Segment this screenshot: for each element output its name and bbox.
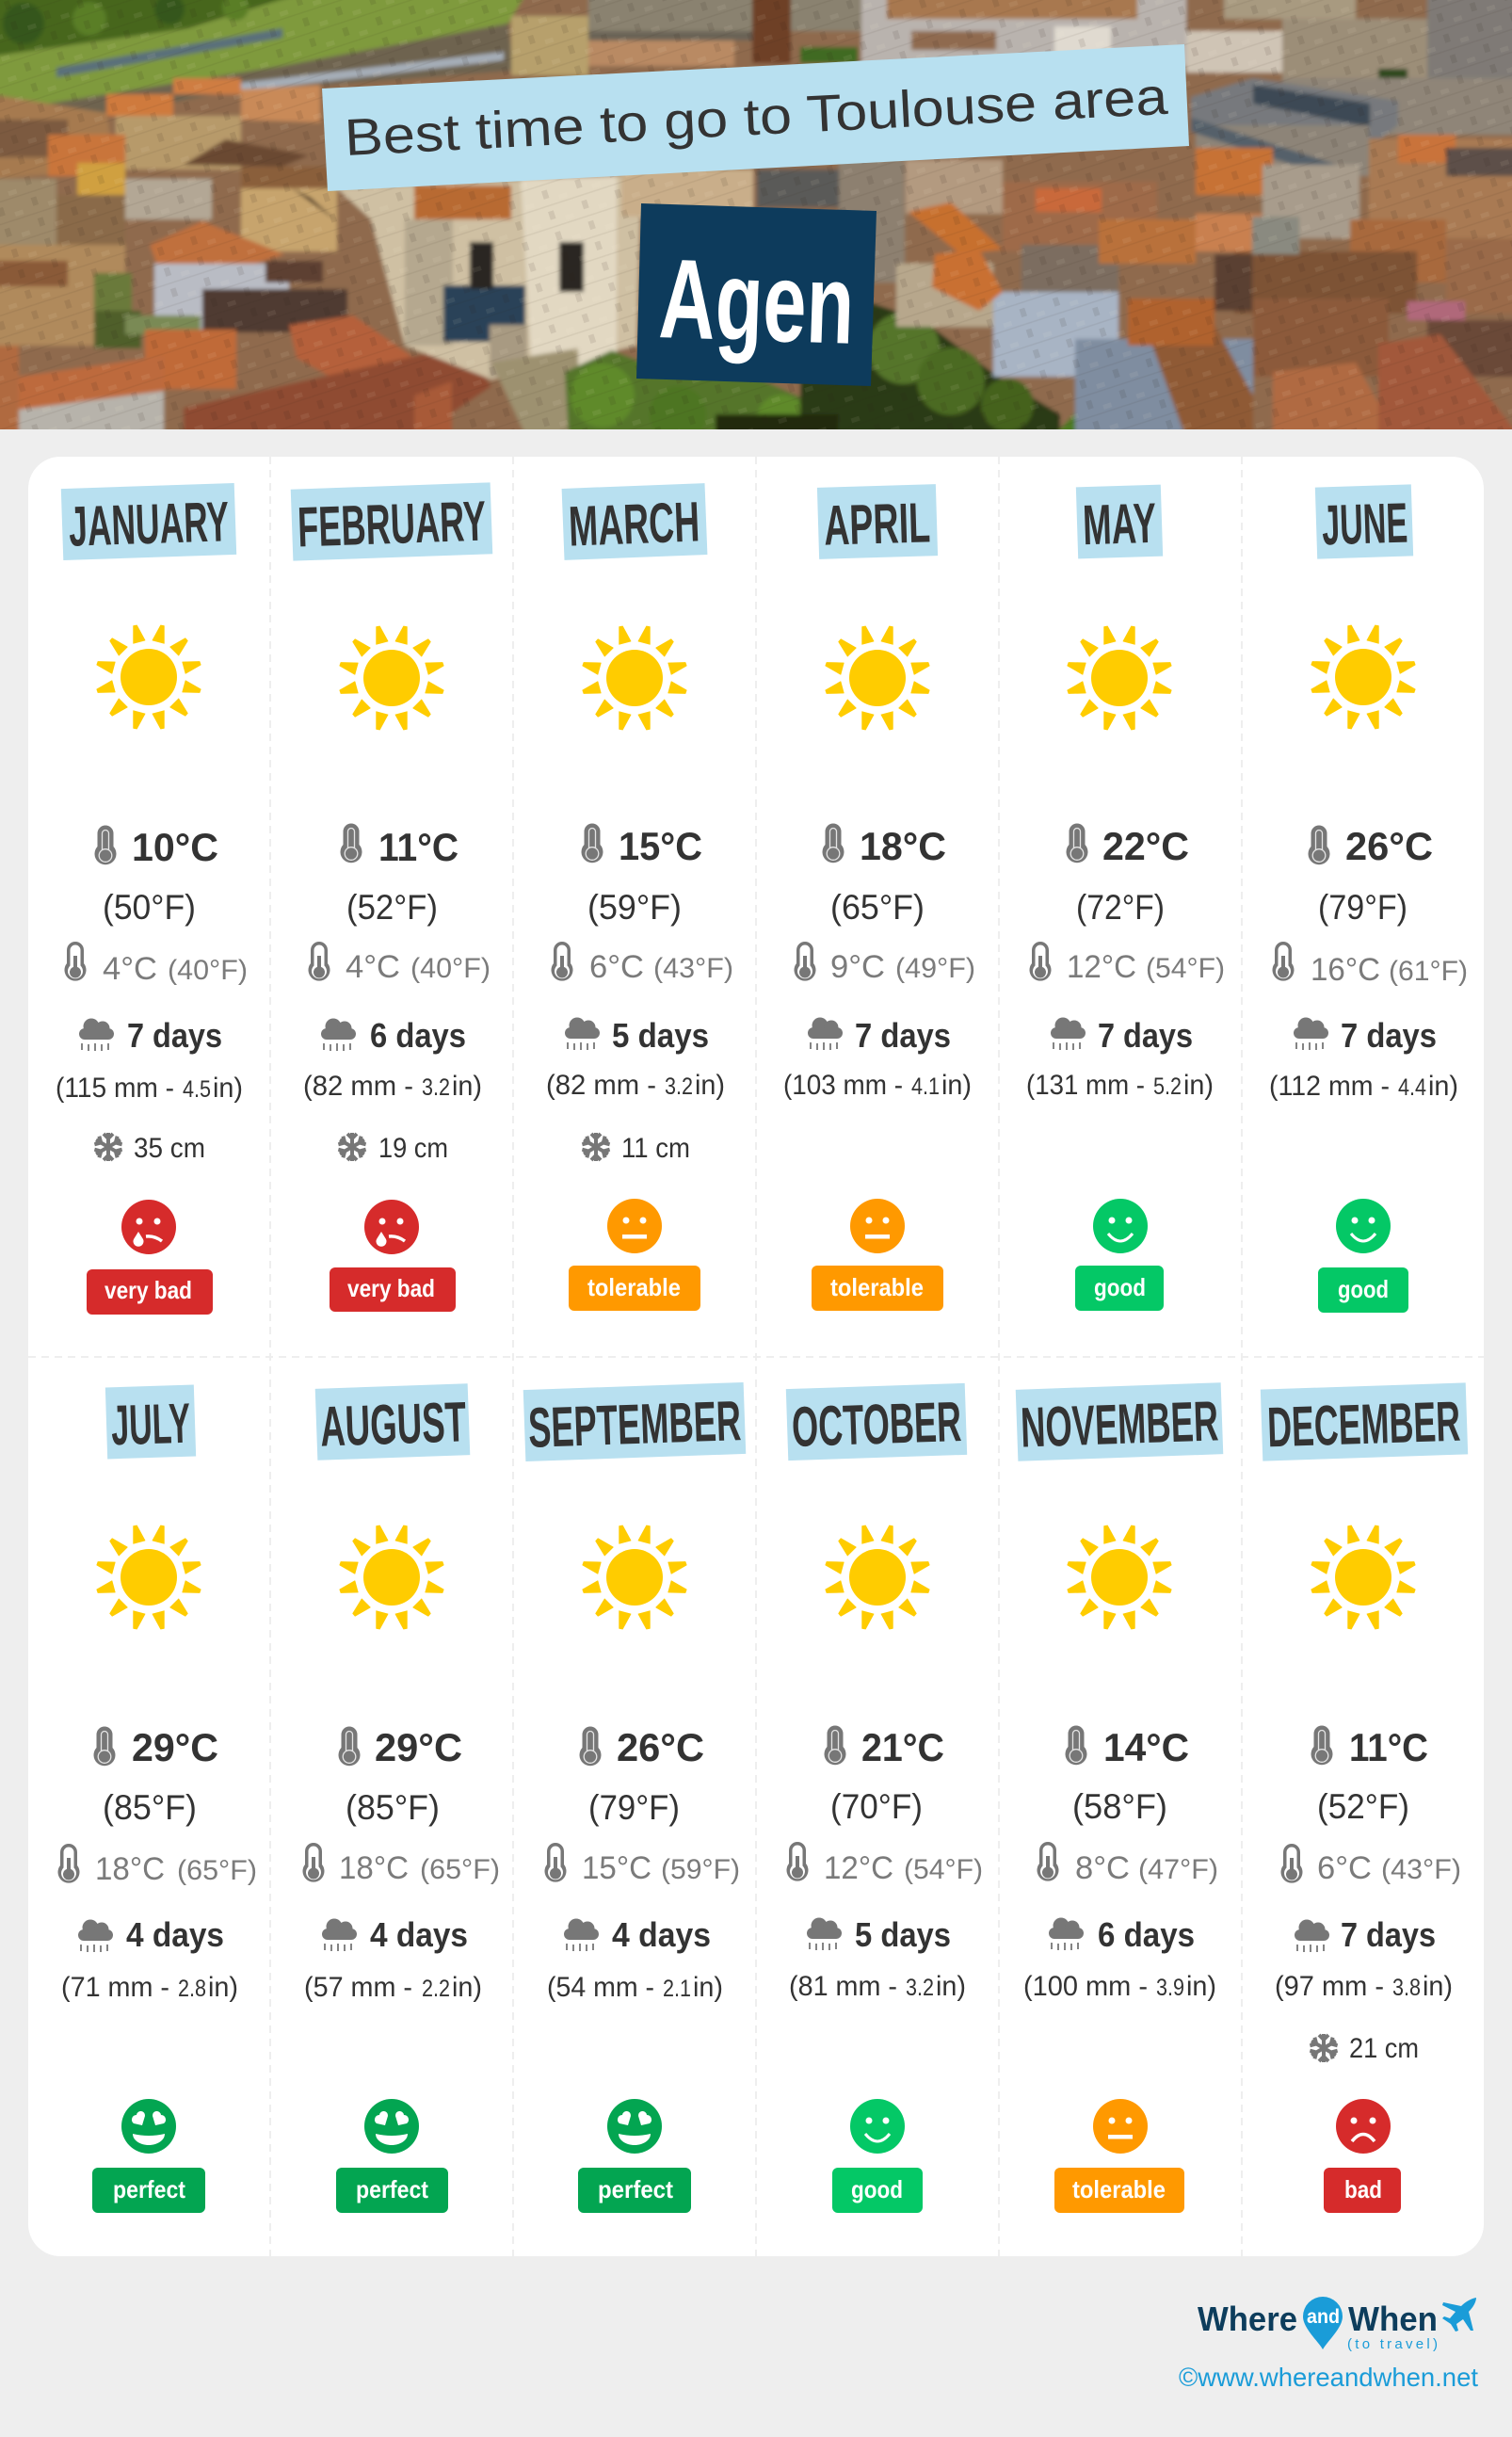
icon: sun (339, 1525, 444, 1629)
icon: rain cloud (322, 1919, 357, 1951)
month label (315, 1383, 470, 1461)
precipitation: (54 mm - (547, 1972, 654, 2003)
high temperature fahrenheit: (50°F) (103, 888, 196, 927)
precipitation: (57 mm - (304, 1972, 412, 2003)
precipitation: in) (213, 1073, 243, 1104)
precipitation: 4.4 (1398, 1074, 1426, 1101)
icon: happy face (1093, 1199, 1148, 1253)
month column: November (1016, 1382, 1223, 2213)
rating: tolerable: tolerable (587, 1273, 681, 1301)
icon: sun (96, 625, 201, 729)
icon: thermometer low (64, 942, 87, 981)
low temperature (346, 949, 491, 985)
low temperature (1311, 952, 1468, 988)
month label (523, 1382, 746, 1461)
rating: perfect (336, 2168, 448, 2213)
icon: thermometer low (309, 942, 330, 981)
month column: September (523, 1382, 746, 2213)
logo: Where and When to travel: (to travel) (1347, 2336, 1438, 2352)
month label (1016, 1382, 1223, 1461)
precipitation (789, 1971, 966, 2002)
snow depth: 35 cm (134, 1133, 205, 1164)
city name block: Agen: Agen (657, 235, 856, 368)
low temperature: 4°C (346, 949, 400, 985)
low temperature: 18°C (339, 1850, 409, 1886)
low temperature (95, 1851, 257, 1887)
precipitation: (71 mm - (61, 1972, 169, 2003)
icon: thermometer low (787, 1842, 808, 1881)
rainy days: 6 days (370, 1016, 466, 1055)
precipitation: in) (208, 1972, 238, 2003)
high temperature: 29°C (375, 1725, 462, 1769)
icon: sun (1311, 1525, 1416, 1629)
month label: APRIL (823, 491, 931, 557)
rating: good (1075, 1266, 1164, 1311)
precipitation: in) (1183, 1070, 1214, 1101)
low temperature (830, 949, 975, 985)
icon: thermometer high (94, 1727, 115, 1766)
rating: tolerable: tolerable (830, 1273, 924, 1301)
month label (1076, 485, 1163, 558)
precipitation: 3.9 (1156, 1975, 1184, 2001)
high temperature: 14°C (1103, 1725, 1189, 1769)
icon: thermometer low (795, 942, 815, 981)
month label (291, 482, 492, 561)
icon: rain cloud (79, 1019, 114, 1051)
low temperature: 8°C (1075, 1850, 1130, 1886)
high temperature: 15°C (619, 824, 702, 868)
logo: Where and When to travel: When (1348, 2300, 1438, 2338)
rating: bad: bad (1344, 2175, 1382, 2203)
precipitation (547, 1972, 723, 2003)
low temperature: (40°F) (168, 955, 248, 986)
icon: thermometer low (1037, 1842, 1058, 1881)
icon: rain cloud (1294, 1017, 1328, 1050)
header photo: aerial view of Agen (0, 0, 1512, 444)
month label: MAY (1082, 492, 1157, 557)
icon: thermometer high (94, 825, 117, 864)
title banner: Best time to go to Toulouse area (343, 67, 1169, 167)
month column: March (546, 483, 733, 1311)
snow depth: 11 cm (621, 1133, 690, 1164)
precipitation: 5.2 (1153, 1073, 1182, 1100)
low temperature: (54°F) (904, 1854, 983, 1885)
high temperature: 26°C (617, 1725, 704, 1769)
icon: heart-eyes face (121, 2099, 176, 2154)
rating: very bad: very bad (105, 1276, 192, 1304)
icon: thermometer high (580, 1727, 601, 1766)
icon: rain cloud (1295, 1919, 1329, 1952)
rating: good: good (1094, 1273, 1146, 1301)
high temperature: 29°C (132, 1725, 218, 1769)
rating: perfect (92, 2168, 205, 2213)
month label: SEPTEMBER (527, 1389, 742, 1460)
rainy days: 7 days (127, 1016, 222, 1055)
rating: good: good (1338, 1275, 1389, 1303)
precipitation (303, 1071, 482, 1102)
logo: Where and When to travel (1198, 2297, 1476, 2352)
rainy days: 5 days (855, 1915, 951, 1954)
icon: sad face (1336, 2099, 1391, 2154)
rainy days: 7 days (1341, 1016, 1437, 1055)
precipitation: (100 mm - (1023, 1971, 1148, 2002)
low temperature (589, 949, 733, 985)
precipitation (1275, 1971, 1453, 2002)
low temperature: 12°C (824, 1850, 893, 1886)
rainy days: 4 days (126, 1915, 224, 1954)
precipitation: in) (941, 1070, 972, 1101)
high temperature: 26°C (1345, 824, 1433, 868)
snow depth: 21 cm (1349, 2033, 1419, 2064)
icon: thermometer high (1066, 823, 1088, 863)
rating: good (832, 2168, 923, 2213)
icon: thermometer low (303, 1843, 324, 1882)
low temperature: 12°C (1067, 949, 1136, 985)
low temperature (1067, 949, 1225, 985)
precipitation (61, 1972, 238, 2003)
month label (817, 484, 938, 559)
month label (105, 1385, 196, 1459)
high temperature: 21°C (861, 1725, 944, 1769)
low temperature (824, 1850, 983, 1886)
icon: airplane (1442, 2298, 1476, 2332)
icon: snowflake (582, 1133, 610, 1161)
high temperature: 22°C (1102, 824, 1189, 868)
icon: sun (1311, 625, 1416, 729)
icon: rain cloud (564, 1919, 599, 1951)
low temperature: (49°F) (895, 953, 975, 984)
icon: sun (1067, 626, 1172, 730)
precipitation: 2.1 (663, 1976, 691, 2002)
icon: heart-eyes face (607, 2099, 662, 2154)
high temperature: 10°C (132, 825, 218, 869)
panel: months grid (28, 457, 1484, 2256)
rainy days: 4 days (612, 1915, 711, 1954)
precipitation: (81 mm - (789, 1971, 897, 2002)
rating: perfect: perfect (113, 2175, 185, 2203)
precipitation (304, 1972, 482, 2003)
month column: April (783, 484, 975, 1311)
month column: August (303, 1383, 500, 2213)
high temperature fahrenheit: (65°F) (830, 888, 925, 927)
rainy days: 5 days (612, 1016, 709, 1055)
icon: rain cloud (808, 1017, 843, 1050)
icon: very bad face (364, 1200, 419, 1254)
icon: rain cloud (321, 1019, 356, 1051)
icon: thermometer low (1030, 942, 1051, 981)
icon: rain cloud (1051, 1017, 1086, 1050)
logo: Where and When to travel: Where (1198, 2300, 1297, 2338)
icon: happy face (1336, 1199, 1391, 1253)
icon: thermometer high (825, 1725, 845, 1765)
month label (61, 483, 236, 560)
low temperature (582, 1850, 740, 1886)
rating: good: good (851, 2175, 903, 2203)
icon: thermometer low (552, 942, 572, 981)
icon: thermometer high (1066, 1725, 1086, 1765)
precipitation: (97 mm - (1275, 1971, 1384, 2002)
precipitation: in) (693, 1972, 723, 2003)
precipitation: (131 mm - (1026, 1070, 1145, 1101)
rating: good (1318, 1267, 1408, 1313)
icon: neutral face (1093, 2099, 1148, 2154)
rainy days: 6 days (1098, 1915, 1195, 1954)
precipitation: in) (695, 1070, 725, 1101)
icon: sun (582, 626, 687, 730)
rating: perfect: perfect (356, 2175, 428, 2203)
rainy days: 4 days (370, 1915, 468, 1954)
month column: December (1261, 1382, 1468, 2213)
rating: tolerable (1054, 2168, 1184, 2213)
high temperature fahrenheit: (52°F) (346, 888, 438, 927)
icon: thermometer high (1309, 825, 1329, 864)
rating: very bad (330, 1267, 456, 1312)
high temperature fahrenheit: (85°F) (103, 1788, 197, 1827)
precipitation: in) (1428, 1071, 1458, 1102)
month label (1315, 484, 1413, 559)
icon: thermometer high (1311, 1725, 1333, 1765)
rating: perfect: perfect (598, 2175, 673, 2203)
low temperature (103, 951, 248, 987)
icon: sun (339, 626, 444, 730)
icon: thermometer low (544, 1843, 567, 1882)
rainy days: 7 days (1098, 1016, 1193, 1055)
copyright url: ©www.whereandwhen.net (1179, 2363, 1478, 2392)
icon: rain cloud (1049, 1917, 1084, 1950)
precipitation: 4.1 (911, 1073, 940, 1100)
icon: thermometer high (582, 823, 603, 863)
precipitation: in) (452, 1972, 482, 2003)
icon: sun (825, 626, 930, 730)
rainy days: 7 days (855, 1016, 951, 1055)
icon: neutral face (850, 1199, 905, 1253)
precipitation: in) (1186, 1971, 1216, 2002)
low temperature: (65°F) (420, 1854, 500, 1885)
month label (562, 483, 707, 560)
precipitation: 4.5 (183, 1076, 211, 1103)
precipitation: 3.2 (665, 1073, 693, 1100)
precipitation: (112 mm - (1269, 1071, 1390, 1102)
precipitation (546, 1070, 725, 1101)
city name block: Agen (636, 203, 877, 386)
low temperature: 15°C (582, 1850, 651, 1886)
icon: thermometer low (1280, 1844, 1303, 1883)
precipitation (56, 1073, 243, 1104)
low temperature: 18°C (95, 1851, 165, 1887)
month label: JANUARY (68, 490, 230, 558)
low temperature: (54°F) (1146, 953, 1225, 984)
icon: heart-eyes face (364, 2099, 419, 2154)
logo: Where and When to travel: and (1307, 2306, 1340, 2328)
snow depth: 19 cm (378, 1133, 448, 1164)
month label: AUGUST (319, 1390, 467, 1459)
title banner (322, 44, 1189, 191)
low temperature: (47°F) (1138, 1854, 1218, 1885)
icon: happy face (850, 2099, 905, 2154)
month column: January (56, 483, 248, 1315)
month label: FEBRUARY (297, 490, 487, 558)
month label: MARCH (568, 490, 700, 558)
precipitation: 3.2 (422, 1074, 450, 1101)
month column: May (1026, 485, 1225, 1311)
precipitation (1023, 1971, 1216, 2002)
rainy days: 7 days (1341, 1915, 1436, 1954)
precipitation: 2.8 (178, 1976, 206, 2002)
rating: tolerable (812, 1266, 943, 1311)
precipitation: (82 mm - (546, 1070, 656, 1101)
icon: snowflake (1310, 2034, 1338, 2062)
low temperature: 6°C (589, 949, 644, 985)
high temperature fahrenheit: (70°F) (830, 1787, 923, 1826)
icon: sun (96, 1525, 201, 1629)
precipitation: (115 mm - (56, 1073, 174, 1104)
precipitation: 2.2 (422, 1976, 450, 2002)
precipitation: in) (1423, 1971, 1453, 2002)
high temperature: 18°C (860, 824, 946, 868)
icon: thermometer low (1273, 942, 1294, 981)
icon: thermometer low (58, 1844, 79, 1883)
icon: thermometer high (341, 823, 362, 863)
low temperature (1317, 1850, 1461, 1886)
high temperature fahrenheit: (79°F) (588, 1788, 680, 1827)
icon: sun (1067, 1525, 1172, 1629)
month label (786, 1383, 967, 1461)
month label: NOVEMBER (1020, 1389, 1219, 1460)
low temperature: (59°F) (661, 1854, 740, 1885)
icon: snowflake (338, 1133, 366, 1161)
precipitation: (103 mm - (783, 1070, 903, 1101)
icon: thermometer high (823, 823, 844, 863)
low temperature: (40°F) (410, 953, 491, 984)
precipitation (783, 1070, 972, 1101)
month label: OCTOBER (791, 1390, 962, 1459)
month column: June (1269, 484, 1468, 1313)
icon: snowflake (94, 1133, 122, 1161)
icon: neutral face (607, 1199, 662, 1253)
high temperature fahrenheit: (79°F) (1318, 888, 1407, 927)
precipitation: 3.2 (906, 1975, 934, 2001)
precipitation (1026, 1070, 1214, 1101)
rating: tolerable: tolerable (1072, 2175, 1166, 2203)
icon: very bad face (121, 1200, 176, 1254)
low temperature (339, 1850, 500, 1886)
low temperature: 6°C (1317, 1850, 1372, 1886)
low temperature (1075, 1850, 1218, 1886)
precipitation: (82 mm - (303, 1071, 413, 1102)
rating: bad (1324, 2168, 1401, 2213)
icon: map pin (1303, 2297, 1343, 2349)
high temperature fahrenheit: (85°F) (346, 1788, 440, 1827)
high temperature fahrenheit: (58°F) (1072, 1787, 1167, 1826)
high temperature: 11°C (1349, 1725, 1428, 1769)
precipitation: 3.8 (1392, 1975, 1421, 2001)
low temperature: (61°F) (1389, 956, 1468, 987)
low temperature: 9°C (830, 949, 885, 985)
high temperature: 11°C (378, 825, 458, 869)
low temperature: 4°C (103, 951, 157, 987)
month label: JUNE (1321, 492, 1408, 557)
month column: October (786, 1383, 983, 2213)
precipitation: in) (452, 1071, 482, 1102)
rating: perfect (578, 2168, 691, 2213)
icon: rain cloud (807, 1917, 842, 1950)
rating: tolerable (569, 1266, 700, 1311)
low temperature: (43°F) (653, 953, 733, 984)
month column: July (58, 1385, 257, 2213)
month label: JULY (110, 1392, 191, 1457)
icon: rain cloud (78, 1919, 113, 1952)
rating: very bad: very bad (347, 1274, 435, 1302)
precipitation: in) (936, 1971, 966, 2002)
high temperature fahrenheit: (59°F) (587, 888, 682, 927)
low temperature: (43°F) (1381, 1854, 1461, 1885)
icon: thermometer high (339, 1727, 360, 1766)
icon: sun (582, 1525, 687, 1629)
low temperature: 16°C (1311, 952, 1380, 988)
icon: rain cloud (565, 1017, 600, 1050)
low temperature: (65°F) (177, 1855, 257, 1886)
rating: very bad (87, 1269, 213, 1315)
high temperature fahrenheit: (52°F) (1317, 1787, 1409, 1826)
precipitation (1269, 1071, 1458, 1102)
high temperature fahrenheit: (72°F) (1076, 888, 1165, 927)
month column: February (291, 482, 492, 1312)
icon: sun (825, 1525, 930, 1629)
